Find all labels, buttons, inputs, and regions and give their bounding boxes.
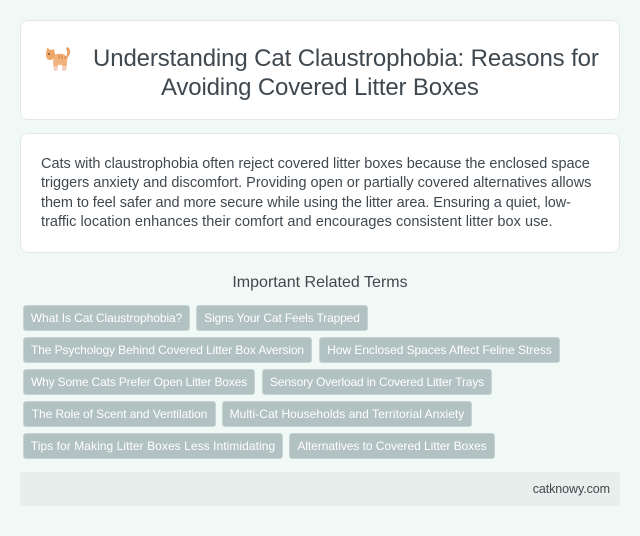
tag bbox=[23, 337, 312, 363]
panel: description: them to feel safer and more secure while using the litter area. Ensuring a quiet, low- bbox=[41, 195, 571, 211]
tag: The Role of Scent and Ventilation bbox=[32, 407, 207, 421]
tag: Sensory Overload in Covered Litter Trays bbox=[270, 375, 484, 389]
tag bbox=[23, 369, 255, 395]
tag: Alternatives to Covered Litter Boxes bbox=[297, 439, 487, 453]
tag bbox=[23, 305, 190, 331]
tag bbox=[262, 369, 492, 395]
tag list bbox=[23, 305, 560, 459]
footer bbox=[20, 472, 620, 506]
panel: description: traffic location enhances their comfort and encourages consistent litter box use. bbox=[41, 214, 553, 230]
tag bbox=[23, 433, 283, 459]
panel: description bbox=[20, 133, 620, 253]
title text: Understanding Cat Claustrophobia: Reasons for bbox=[93, 45, 599, 72]
tag bbox=[319, 337, 560, 363]
tag bbox=[289, 433, 495, 459]
tag: What Is Cat Claustrophobia? bbox=[31, 311, 182, 325]
tag bbox=[196, 305, 368, 331]
tag: How Enclosed Spaces Affect Feline Stress bbox=[327, 343, 552, 357]
footer credit: catknowy.com bbox=[533, 482, 610, 496]
panel: description: triggers anxiety and discomfort. Providing open or partially covered alternatives allows bbox=[41, 175, 591, 191]
tag: Tips for Making Litter Boxes Less Intimidating bbox=[31, 439, 275, 453]
tag: Multi-Cat Households and Territorial Anxiety bbox=[230, 407, 464, 421]
tag: The Psychology Behind Covered Litter Box Aversion bbox=[31, 343, 304, 357]
tag bbox=[23, 401, 216, 427]
heading: related terms: Important Related Terms bbox=[232, 274, 408, 291]
tag bbox=[222, 401, 472, 427]
panel: title card: Avoiding Covered Litter Boxes bbox=[161, 74, 479, 101]
panel: title card bbox=[20, 20, 620, 120]
panel: description: Cats with claustrophobia often reject covered litter boxes because the enclosed space bbox=[41, 156, 590, 172]
icon: cat bbox=[46, 47, 70, 71]
tag: Signs Your Cat Feels Trapped bbox=[204, 311, 360, 325]
tag: Why Some Cats Prefer Open Litter Boxes bbox=[31, 375, 247, 389]
